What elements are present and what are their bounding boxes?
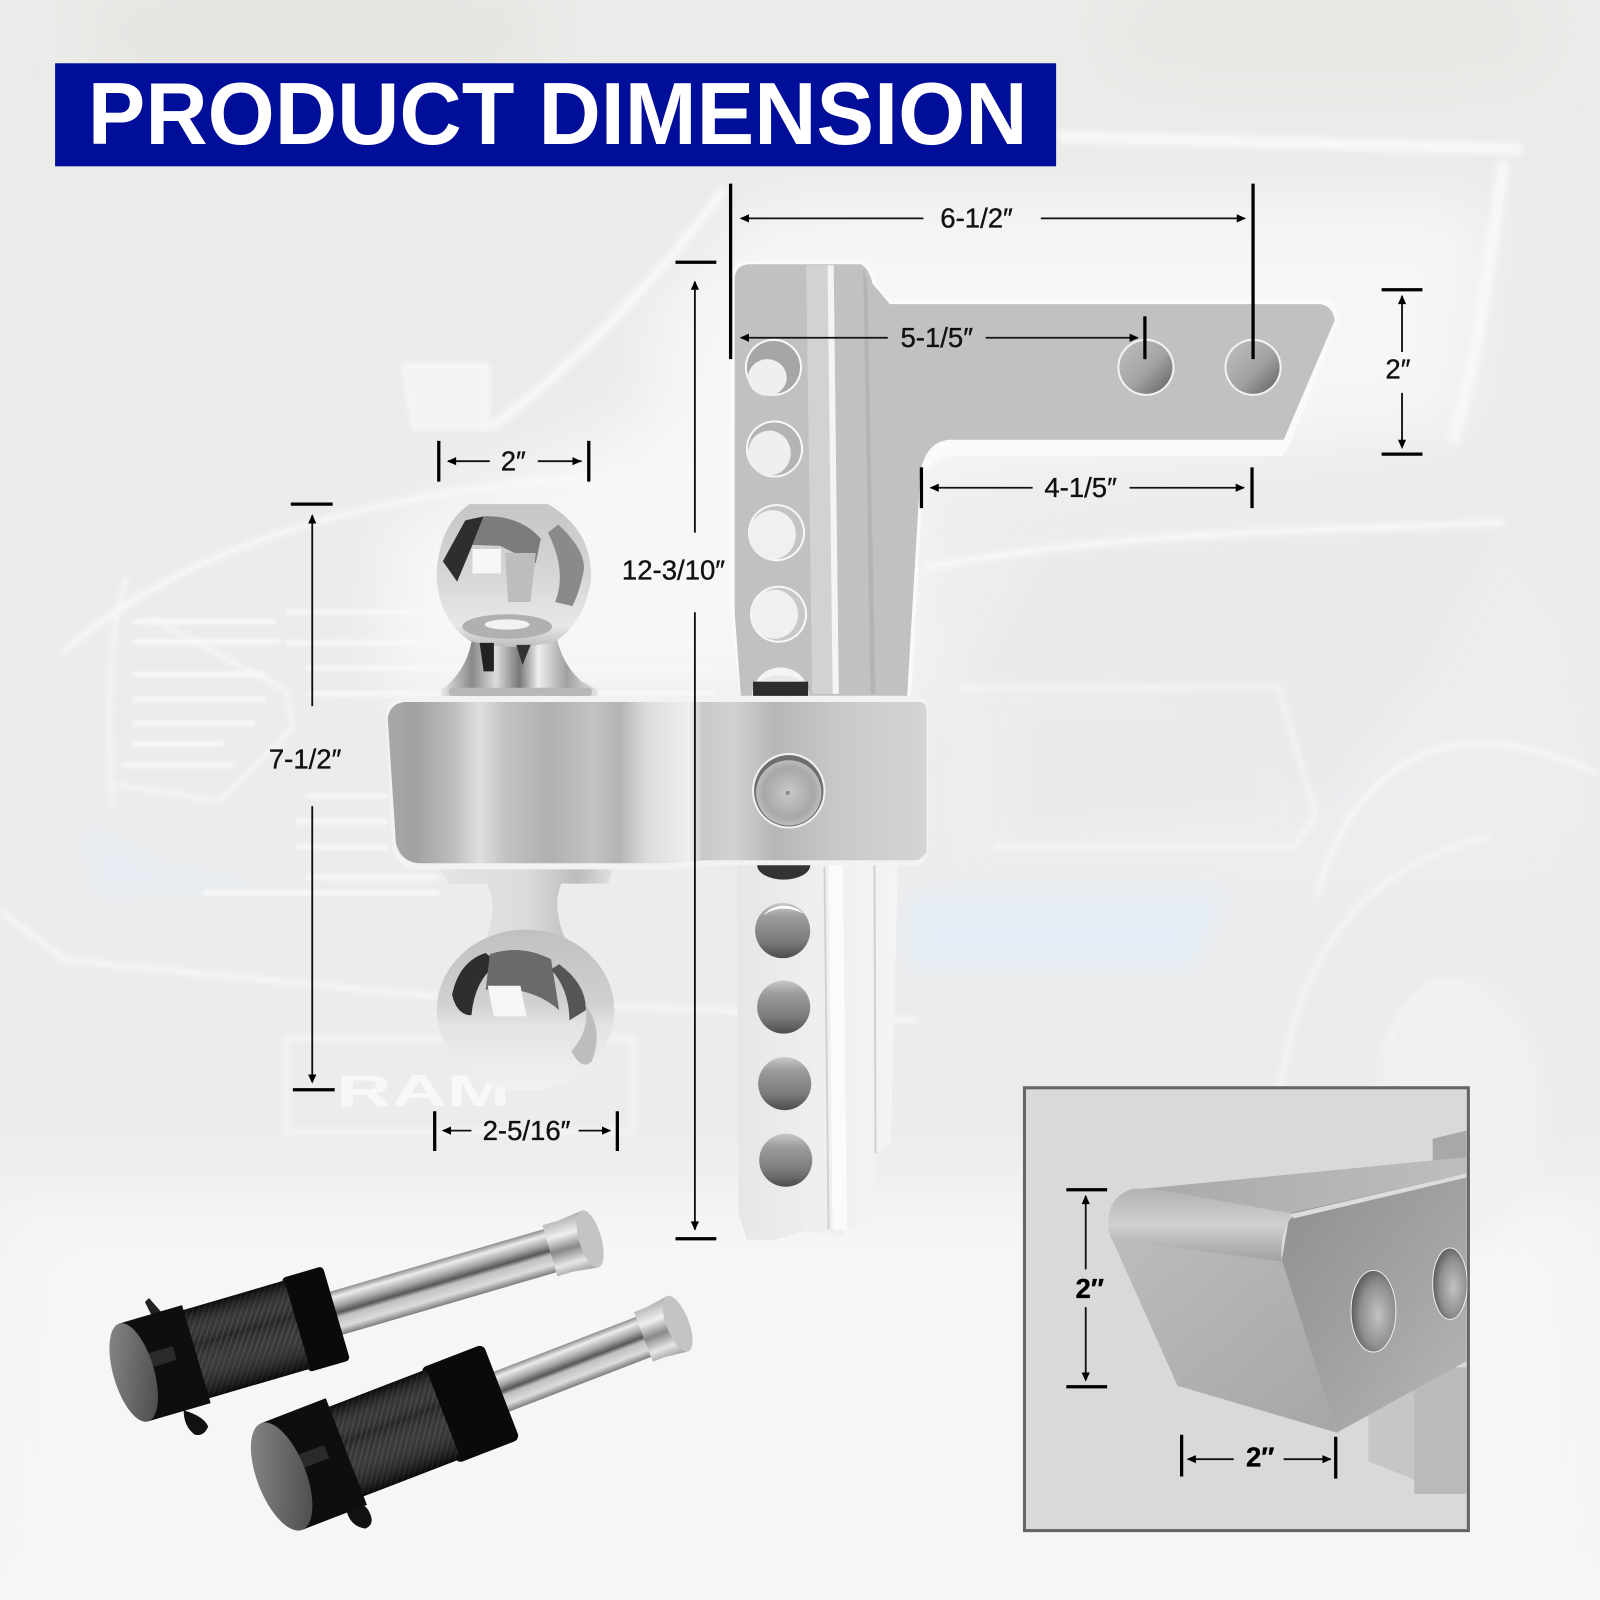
cab and hood highlights xyxy=(490,189,724,429)
rounded band xyxy=(1108,1189,1296,1261)
arm holes xyxy=(1117,339,1282,396)
dimension: 5-1/5 in xyxy=(740,316,1145,359)
dimension: 2 in upper ball xyxy=(439,441,589,482)
dimension: 7-1/2 in ball span: 7-1/2″ xyxy=(269,744,342,775)
lower tube xyxy=(1368,1390,1414,1480)
inset dimension: width 2 in xyxy=(1182,1435,1336,1479)
inset panel: arm end detail xyxy=(1024,1088,1468,1531)
dimension: 7-1/2 in ball span xyxy=(269,504,342,1090)
lower hitch ball xyxy=(437,869,614,1091)
receiver block xyxy=(386,696,929,869)
wheel xyxy=(1378,980,1541,1245)
hitch shank and drop arm xyxy=(731,261,1340,1240)
side mirror xyxy=(403,365,488,429)
dimension: 2 in upper ball: 2″ xyxy=(501,446,526,477)
headlight xyxy=(1020,714,1270,827)
upper shank holes xyxy=(745,339,809,724)
dimension: 2 in arm height: 2″ xyxy=(1385,354,1411,385)
dimension: 12-3/10 in height xyxy=(622,262,725,1239)
bumper badge text: RAM xyxy=(337,1065,510,1116)
upper shank with arm xyxy=(731,261,1340,724)
dimension: 12-3/10 in height: 12-3/10″ xyxy=(622,555,725,586)
pin body xyxy=(238,1266,709,1539)
dimension: 2-5/16 in lower ball xyxy=(435,1111,617,1151)
title banner: PRODUCT DIMENSION xyxy=(88,65,1028,163)
hitch pin 1 xyxy=(100,1187,615,1435)
grille stripes xyxy=(122,612,714,893)
inset dimension: height 2 in: 2″ xyxy=(1076,1273,1104,1304)
pin body xyxy=(100,1187,615,1427)
dimension: 2-5/16 in lower ball: 2-5/16″ xyxy=(483,1115,571,1146)
tabs xyxy=(145,1298,163,1318)
dimension: 5-1/5 in: 5-1/5″ xyxy=(900,322,973,353)
dimension: 4-1/5 in: 4-1/5″ xyxy=(1044,472,1117,503)
top face xyxy=(1133,1157,1466,1214)
hitch pin 2 xyxy=(238,1266,709,1539)
front face xyxy=(1112,1240,1337,1433)
top knob xyxy=(1433,1131,1466,1173)
inset dimension: height 2 in xyxy=(1066,1190,1107,1387)
dimension: 6-1/2 in overall length xyxy=(731,184,1253,359)
dimension: 6-1/2 in overall length: 6-1/2″ xyxy=(940,203,1013,234)
inset dimension: width 2 in: 2″ xyxy=(1246,1441,1274,1472)
upper hitch ball xyxy=(437,504,598,696)
dimension: 2 in arm height xyxy=(1382,290,1422,454)
lower shank xyxy=(737,851,898,1240)
dimension: 4-1/5 in xyxy=(921,467,1252,508)
side face xyxy=(1282,1173,1466,1433)
tab xyxy=(347,1502,372,1529)
pin head xyxy=(752,753,826,829)
